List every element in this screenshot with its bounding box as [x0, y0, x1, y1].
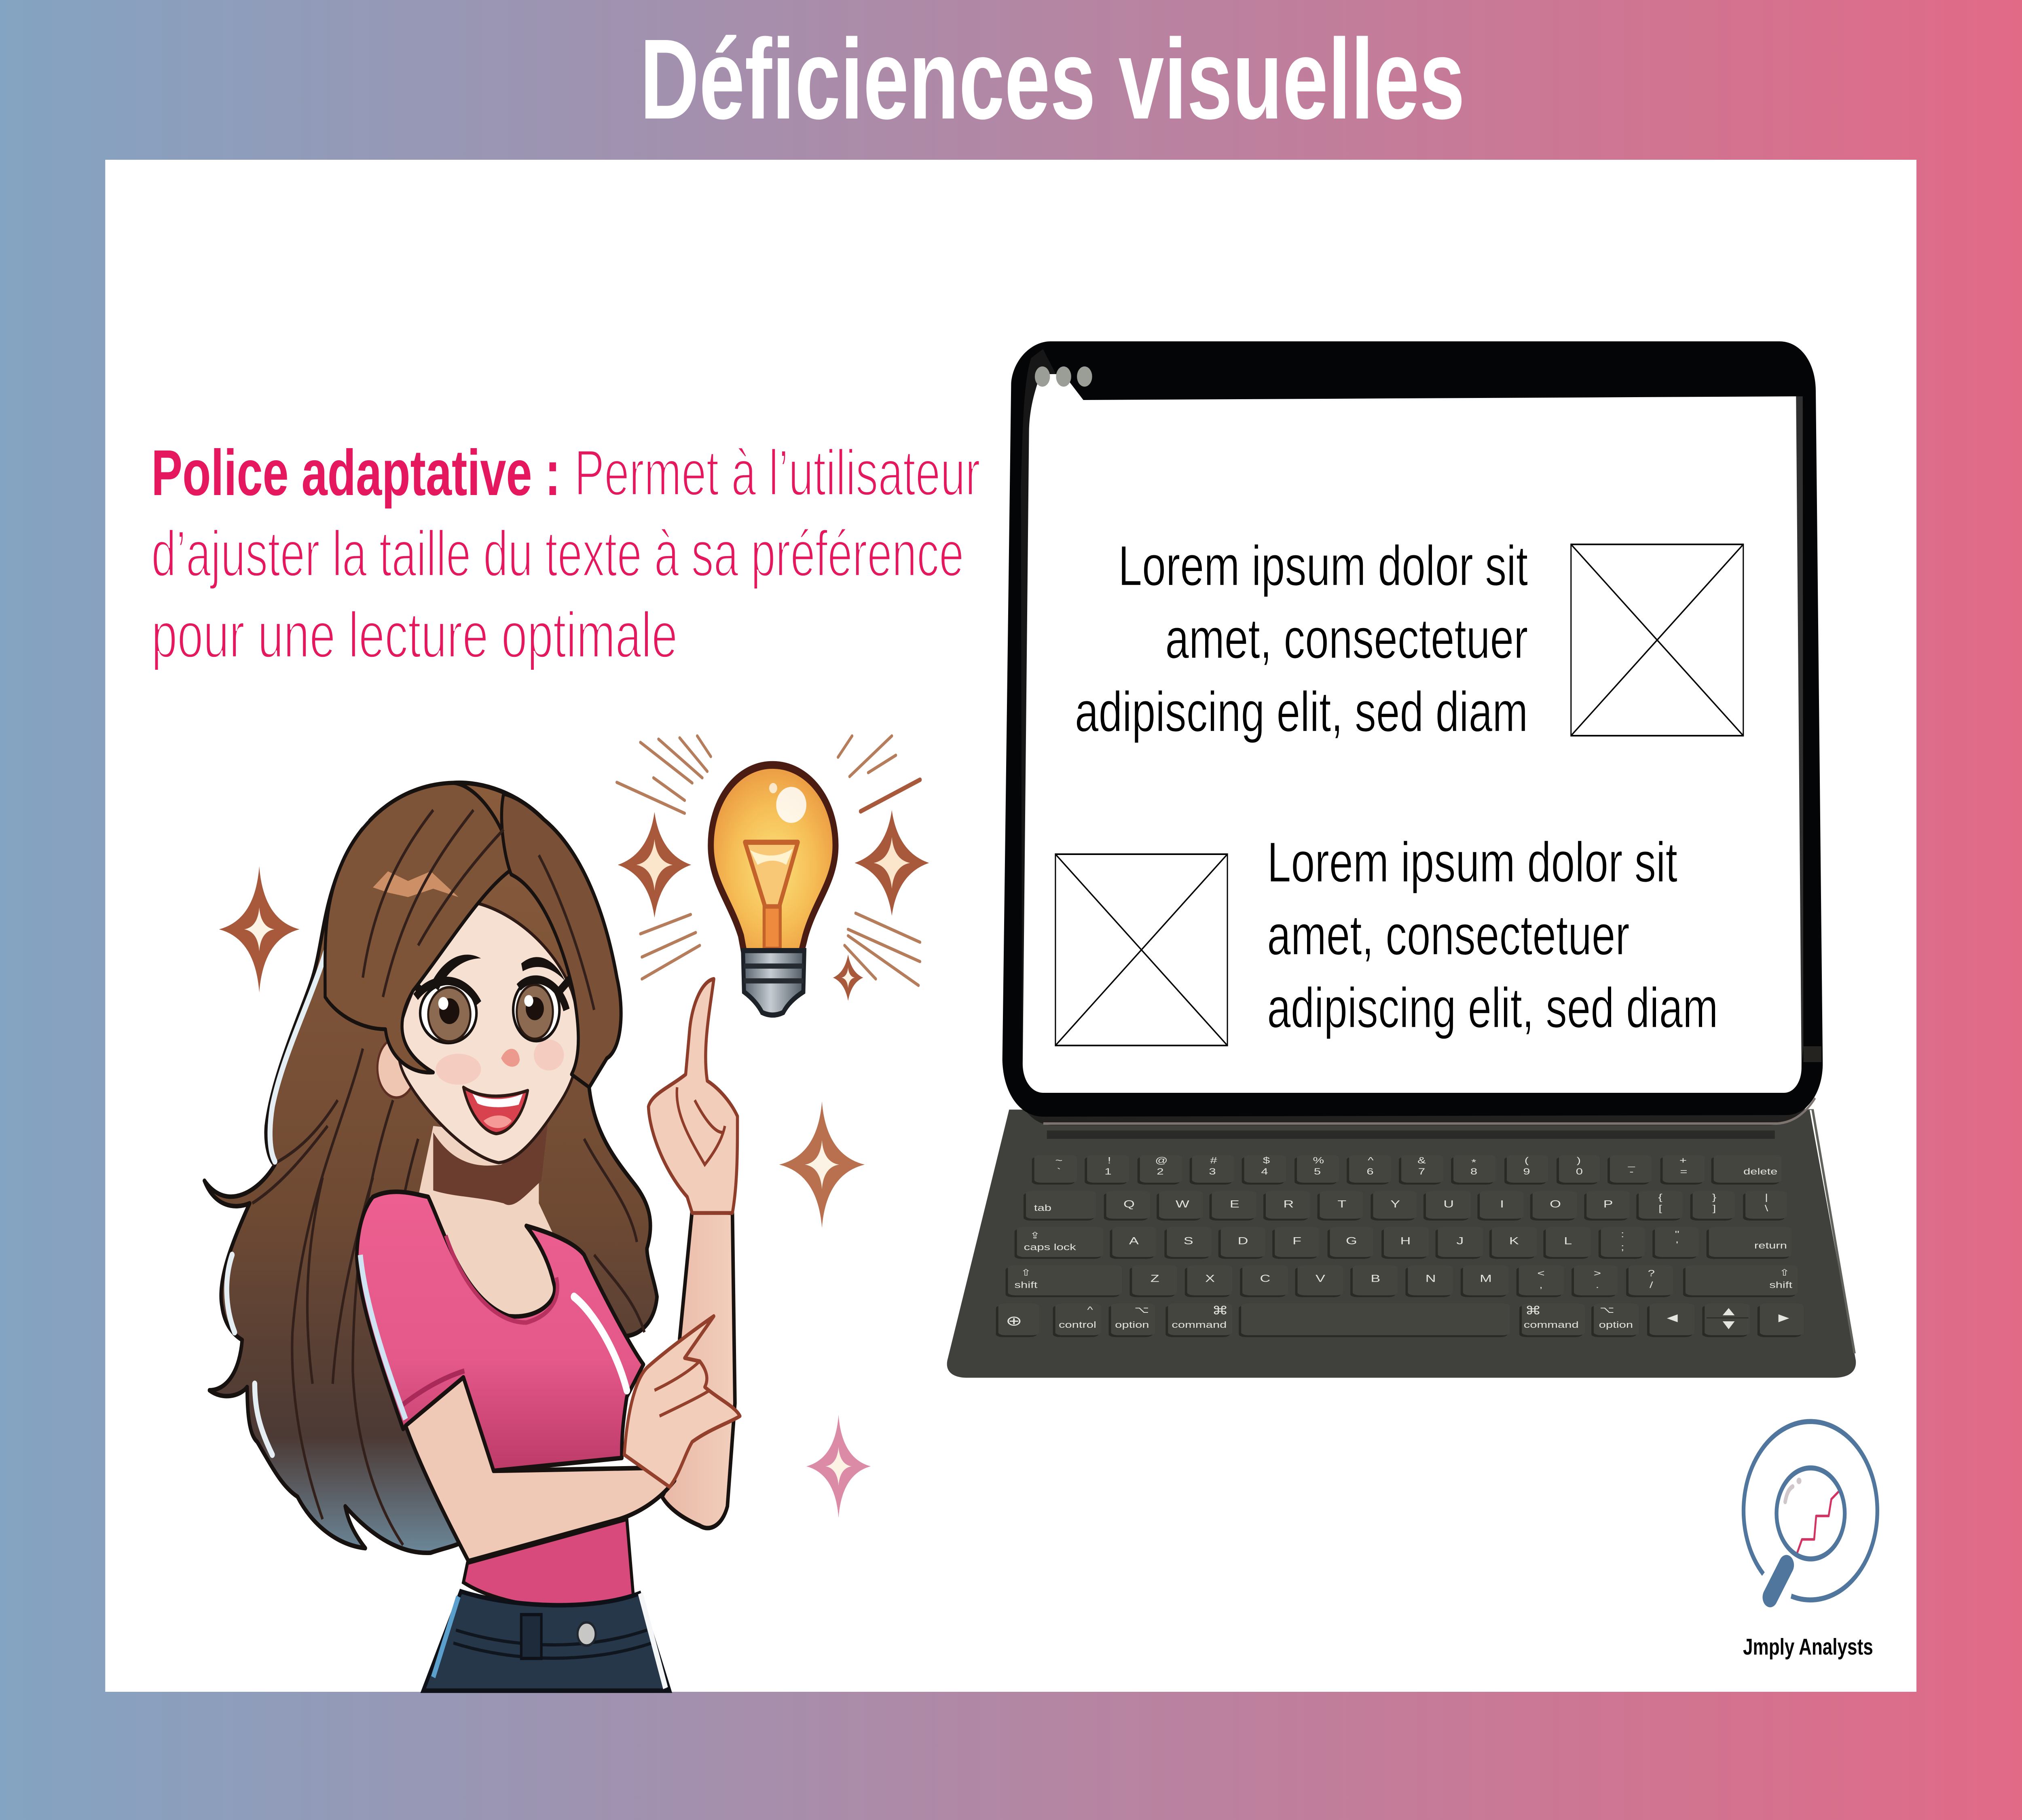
keyboard key labels: !: [1108, 1155, 1111, 1166]
text block: police adaptative: pour une lecture optimale: [151, 599, 677, 671]
keyboard key labels: *: [1471, 1158, 1476, 1167]
character: lower hand: [624, 1316, 740, 1487]
keyboard key labels: ;: [1621, 1242, 1624, 1252]
character: face: [398, 904, 579, 1163]
illustration: girl pointing at a light bulb: [205, 736, 929, 1691]
character: neck shadow: [433, 1113, 549, 1205]
keyboard key labels: `: [1057, 1167, 1061, 1177]
screen text block 2: adipiscing elit, sed diam: [1267, 976, 1718, 1040]
screen text block 2: amet, consectetuer: [1267, 904, 1630, 967]
keyboard key labels: W: [1176, 1198, 1190, 1210]
tablet inner bezel right: [1796, 396, 1803, 1068]
keyboard key labels: +: [1679, 1155, 1687, 1166]
keyboard key labels: <: [1537, 1268, 1545, 1278]
keyboard key labels: B: [1371, 1273, 1380, 1284]
image placeholder 1: [1571, 544, 1743, 736]
keyboard key labels: E: [1230, 1198, 1239, 1210]
keyboard key labels: ⇪: [1030, 1231, 1040, 1240]
icon: light rays: [617, 736, 920, 985]
keyboard key labels: $: [1263, 1155, 1270, 1166]
keyboard key labels: caps lock: [1024, 1242, 1076, 1252]
keyboard key labels: ⇧: [1779, 1268, 1789, 1278]
keyboard key labels: ?: [1648, 1268, 1655, 1278]
icon: magnifier: [1743, 1422, 1877, 1600]
keyboard key labels: 0: [1576, 1167, 1583, 1177]
keyboard key labels: ⊕: [1006, 1313, 1022, 1329]
text block: police adaptative: [151, 436, 980, 671]
keyboard key labels: tab: [1034, 1203, 1051, 1213]
screen text block 1: Lorem ipsum dolor sit: [1118, 534, 1528, 598]
keyboard key labels: #: [1210, 1155, 1217, 1166]
keyboard key labels: S: [1184, 1235, 1193, 1246]
character: nose: [501, 1049, 520, 1067]
keyboard key labels: 1: [1104, 1167, 1112, 1177]
screen text block 1: adipiscing elit, sed diam: [1075, 680, 1528, 744]
title: Déficiences visuelles: [640, 15, 1465, 143]
keyboard key shadows: [996, 1157, 1801, 1337]
icon: light bulb: [711, 765, 835, 1015]
keyboard key labels: .: [1596, 1280, 1599, 1290]
screen text block 1: amet, consectetuer: [1165, 607, 1528, 671]
keyboard key labels: ⌥: [1600, 1305, 1614, 1315]
character: back hair: [205, 783, 657, 1553]
character: shirt collar and sleeve: [360, 1236, 627, 1419]
keyboard key labels: 7: [1418, 1167, 1425, 1177]
character: pointing hand: [648, 979, 738, 1213]
keyboard key labels: [1006, 1155, 1793, 1330]
keyboard key labels: {: [1658, 1192, 1662, 1202]
keyboard key labels: >: [1594, 1268, 1601, 1278]
tablet black frame: [1003, 341, 1823, 1117]
keyboard key labels: }: [1712, 1192, 1716, 1202]
character: front hair left: [325, 783, 514, 1073]
keyboard key labels: Q: [1123, 1198, 1135, 1210]
tablet inner bezel left: [1021, 349, 1060, 1068]
character: front hair right: [501, 794, 621, 1087]
tablet window dots: [1035, 366, 1092, 387]
logo text: Jmply Analysts: [1743, 1634, 1873, 1659]
keyboard key labels: V: [1316, 1273, 1325, 1284]
keyboard key labels: O: [1550, 1198, 1561, 1210]
keyboard key labels: ⌘: [1525, 1304, 1542, 1317]
keyboard key labels: 4: [1261, 1167, 1268, 1177]
keyboard key labels: return: [1754, 1240, 1787, 1251]
keyboard key faces: [998, 1155, 1804, 1335]
keyboard hinge slot: [1047, 1130, 1775, 1139]
keyboard key labels: =: [1680, 1167, 1687, 1177]
character: pink t-shirt: [357, 1192, 643, 1471]
keyboard key labels: 3: [1209, 1167, 1216, 1177]
keyboard key labels: ⌘: [1212, 1304, 1229, 1317]
character: blush: [436, 1039, 564, 1085]
keyboard key labels: T: [1337, 1198, 1346, 1210]
character: mouth: [463, 1087, 528, 1134]
keyboard key labels: K: [1509, 1235, 1519, 1246]
keyboard key labels: ]: [1713, 1203, 1716, 1213]
keyboard key labels: U: [1443, 1198, 1454, 1210]
keyboard key labels: shift: [1015, 1280, 1038, 1290]
keyboard key labels: L: [1564, 1235, 1572, 1246]
keyboard key labels: Y: [1390, 1198, 1400, 1210]
keyboard key labels: 6: [1366, 1167, 1374, 1177]
screen text block 2: [1267, 831, 1718, 1040]
keyboard key labels: 8: [1470, 1167, 1477, 1177]
keyboard key labels: /: [1650, 1280, 1653, 1290]
character: neck and chest: [418, 1126, 569, 1332]
character: hair shine and strands: [363, 810, 594, 1010]
screen text block 2: Lorem ipsum dolor sit: [1267, 831, 1677, 894]
text block: police adaptative: Police adaptative :: [151, 436, 560, 509]
keyboard base: [947, 1110, 1856, 1378]
keyboard key labels: ,: [1539, 1280, 1543, 1290]
character: ear: [377, 1038, 416, 1098]
keyboard key labels: %: [1313, 1155, 1324, 1166]
keyboard key labels: delete: [1743, 1167, 1777, 1177]
keyboard key labels: H: [1400, 1235, 1411, 1246]
laptop mockup: [947, 341, 1856, 1378]
keyboard key labels: 2: [1157, 1167, 1164, 1177]
keyboard key labels: R: [1283, 1198, 1294, 1210]
character: raised arm: [662, 1210, 735, 1528]
character: folded forearm: [406, 1378, 675, 1561]
tablet side gap: [1803, 1046, 1821, 1062]
keyboard key labels: Z: [1151, 1273, 1159, 1284]
keyboard key labels: \: [1765, 1203, 1768, 1213]
keyboard key labels: ): [1577, 1155, 1581, 1166]
keyboard key labels: F: [1292, 1235, 1301, 1246]
keyboard key labels: ~: [1055, 1155, 1062, 1166]
character: eyes: [408, 954, 570, 1043]
keyboard key labels: G: [1346, 1235, 1357, 1246]
keyboard key labels: @: [1155, 1155, 1168, 1166]
tablet screen: [1023, 374, 1802, 1093]
keyboard key labels: command: [1172, 1320, 1227, 1330]
keyboard key labels: option: [1115, 1320, 1149, 1330]
keyboard key labels: |: [1765, 1192, 1768, 1202]
keyboard key labels: &: [1417, 1155, 1426, 1166]
keyboard key labels: J: [1456, 1235, 1464, 1246]
icon: sparkles: [219, 810, 929, 1518]
logo: Jmply Analysts: [1743, 1422, 1877, 1659]
screen text block 1: [1075, 534, 1528, 744]
keyboard key labels: shift: [1769, 1280, 1793, 1290]
keyboard key labels: ^: [1368, 1155, 1374, 1166]
white content panel: [105, 160, 1916, 1692]
keyboard key labels: I: [1500, 1198, 1504, 1210]
image placeholder 2: [1055, 854, 1227, 1045]
keyboard key labels: M: [1480, 1273, 1492, 1284]
text block: police adaptative: d’ajuster la taille du texte à sa préférence: [151, 517, 964, 590]
keyboard key labels: :: [1621, 1230, 1624, 1239]
keyboard key labels: D: [1238, 1235, 1248, 1246]
keyboard key labels: ⇧: [1021, 1268, 1031, 1278]
keyboard key labels: [: [1658, 1203, 1662, 1213]
character: hair strands: [252, 1049, 645, 1545]
tablet underside edge: [1043, 1098, 1815, 1124]
keyboard key labels: X: [1205, 1273, 1215, 1284]
keyboard key labels: P: [1603, 1198, 1613, 1210]
keyboard key labels: command: [1524, 1320, 1579, 1330]
character: lower shirt: [463, 1519, 633, 1607]
keyboard key labels: A: [1129, 1235, 1139, 1246]
tablet underside band: [1010, 1068, 1823, 1125]
keyboard key labels: N: [1426, 1273, 1436, 1284]
keyboard key labels: 9: [1523, 1167, 1530, 1177]
keyboard key labels: ': [1676, 1240, 1678, 1250]
keyboard key labels: (: [1525, 1155, 1529, 1166]
keyboard arrows: [1667, 1308, 1789, 1329]
character: hair highlight rim: [227, 823, 368, 1455]
character: jeans: [423, 1591, 670, 1691]
text block: police adaptative: Permet à l’utilisateur: [574, 436, 980, 509]
keyboard key labels: ": [1675, 1230, 1679, 1239]
keyboard key labels: control: [1059, 1320, 1096, 1330]
keyboard key labels: 5: [1314, 1167, 1321, 1177]
keyboard key labels: option: [1599, 1320, 1633, 1330]
keyboard key labels: ⌥: [1134, 1305, 1149, 1315]
keyboard key labels: ^: [1087, 1305, 1093, 1315]
keyboard key labels: C: [1260, 1273, 1270, 1284]
keyboard key labels: _: [1628, 1158, 1635, 1167]
keyboard key labels: -: [1629, 1167, 1634, 1177]
